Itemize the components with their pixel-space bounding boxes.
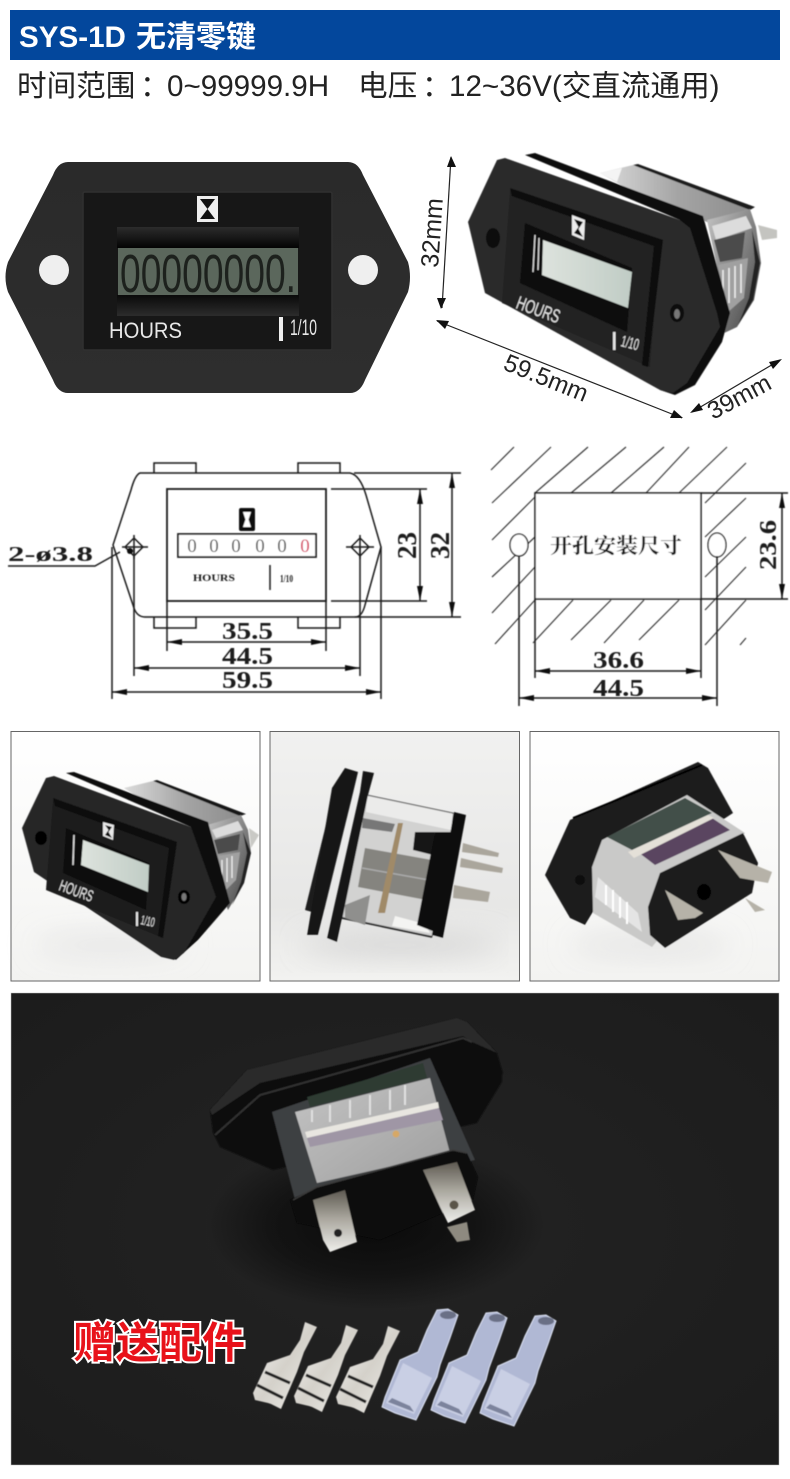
counter strip: 0 (187, 536, 197, 557)
mounting tabs (154, 463, 340, 628)
label: 1/10 (279, 315, 317, 341)
dimension arrows and labels (416, 156, 782, 425)
rear cap (648, 833, 758, 948)
specification line: ： (422, 70, 452, 103)
mounting holes (35, 831, 190, 904)
bezel (502, 190, 660, 367)
specification line: 时间范围 (17, 70, 135, 103)
photo panel: dark background with accessories (11, 993, 779, 1465)
dimension values: 23 (392, 532, 422, 559)
icon: hourglass (572, 215, 585, 240)
dimension: 32mm: 32mm (416, 197, 449, 268)
terminal pins (313, 1162, 475, 1252)
rear plate (417, 812, 466, 938)
dimension lines (112, 473, 461, 699)
display rectangle (167, 489, 326, 601)
counter strip: 0 (209, 536, 219, 557)
crosshair holes (122, 535, 374, 559)
small HOURS label: HOURS (193, 573, 235, 583)
counter strip (178, 534, 316, 557)
meter rear view (210, 1018, 503, 1252)
clear housing end face (208, 815, 251, 910)
internal circuit board (345, 848, 443, 933)
label: 1/10 (136, 912, 156, 930)
counter strip: 0 (277, 536, 287, 557)
sleeve 2 (431, 1312, 507, 1423)
LCD (520, 223, 632, 332)
mounting holes (510, 533, 726, 557)
holes (575, 875, 711, 900)
front plates (305, 768, 374, 942)
purple strip (307, 1108, 443, 1147)
shadow under meter (205, 1140, 545, 1310)
sleeve 1 (382, 1309, 458, 1420)
terminal pin (758, 225, 777, 240)
bezel (46, 800, 174, 938)
small 1/10 label: 1/10 (280, 573, 293, 585)
technical drawing: front dimensions (8, 463, 461, 699)
specification line: ： (140, 70, 170, 103)
clear housing top (124, 781, 244, 825)
dimension: 39mm: 39mm (703, 369, 776, 425)
hole callout: 2-ø3.8 (8, 542, 93, 566)
title banner: SYS-1D (19, 21, 126, 54)
dimension values: 59.5 (222, 668, 273, 694)
cut-out label: 开孔安装尺寸 (550, 534, 682, 558)
housing outline (113, 473, 381, 617)
product front view (6, 162, 410, 393)
terminal pins (665, 850, 772, 920)
accessories label: 赠送配件 (73, 1320, 245, 1368)
dimension values: 23.6 (756, 520, 782, 570)
dimension values: 36.6 (593, 648, 644, 674)
insulating sleeves (382, 1309, 556, 1426)
purple circuit board (638, 818, 730, 865)
label: 1/10: 1/10 (290, 315, 317, 340)
dimension: 59.5mm (436, 320, 683, 418)
LCD window: 00000000. (120, 244, 296, 304)
dimension: 39mm (690, 359, 782, 425)
clear rear housing top (600, 165, 753, 222)
terminal pins (453, 843, 503, 902)
terminal 1 (253, 1322, 317, 1409)
metal crimp terminals (253, 1322, 400, 1413)
dimension values (222, 532, 455, 694)
dimension: 59.5mm: 59.5mm (500, 350, 592, 408)
shadow (35, 935, 185, 955)
photo panel: angled front view (11, 732, 260, 981)
label: 1/10: 1/10 (619, 333, 641, 354)
technical drawing: cut-out dimensions (491, 447, 788, 706)
photo panel: rear view (530, 732, 779, 981)
display bezel (83, 192, 332, 350)
counter strip: 0 (231, 536, 241, 557)
title banner: 无清零键 (136, 21, 256, 54)
specification line: 0~99999.9H (167, 70, 329, 103)
terminal 3 (336, 1326, 400, 1413)
icon: hourglass (103, 822, 114, 840)
label: HOURS: HOURS (513, 293, 563, 328)
clear housing end face (707, 209, 761, 335)
hole callout (8, 542, 120, 566)
dimension values (593, 520, 782, 702)
rear plate (66, 772, 230, 960)
arrowheads (519, 493, 785, 701)
front plate (468, 158, 720, 393)
hatching (491, 447, 746, 645)
label: HOURS: HOURS (109, 318, 182, 343)
shadow (570, 936, 730, 954)
title banner (10, 10, 780, 60)
specification line: 12~36V(交直流通用) (449, 70, 720, 103)
plate (545, 762, 733, 925)
hourglass symbol (239, 508, 255, 531)
arrowheads (112, 473, 455, 695)
shadow (300, 936, 500, 954)
terminal pin (249, 828, 259, 848)
front plate (22, 776, 216, 960)
clear housing (342, 795, 453, 937)
label: 1/10: 1/10 (139, 912, 156, 930)
terminal 2 (294, 1325, 358, 1412)
specification line: 电压 (358, 70, 417, 103)
LCD window (63, 828, 149, 910)
counter strip: 0 (255, 536, 265, 557)
dimension values: 32 (425, 532, 455, 559)
rear plate (525, 153, 730, 395)
mounting holes (486, 228, 684, 322)
ribbed clear side (595, 877, 642, 932)
rear plate (210, 1018, 503, 1170)
photo panel: side view (270, 732, 520, 981)
black component (413, 832, 435, 855)
dimension values: 44.5 (593, 676, 644, 702)
brass post (378, 823, 403, 913)
front plate (215, 1038, 502, 1170)
dimension values: 44.5 (222, 644, 273, 670)
clear housing (272, 1058, 475, 1200)
dimension values: 35.5 (222, 619, 273, 645)
mounting holes (39, 255, 378, 285)
small 1/10 label (270, 565, 293, 590)
label: HOURS: HOURS (57, 878, 95, 906)
white strip (305, 1102, 439, 1138)
upper circuit board (607, 798, 712, 850)
dimension: 32mm (416, 156, 456, 309)
clear housing (592, 795, 745, 947)
rear cap (290, 1150, 478, 1240)
dimension lines (519, 493, 788, 706)
sleeve 3 (480, 1315, 556, 1426)
label: 1/10 (613, 332, 641, 354)
cut-out rectangle (535, 493, 701, 599)
LCD window (117, 227, 299, 316)
counter strip: 0 (300, 536, 310, 557)
icon: hourglass (197, 196, 218, 222)
product angled view (468, 153, 777, 395)
upper circuit strip (307, 1063, 427, 1107)
